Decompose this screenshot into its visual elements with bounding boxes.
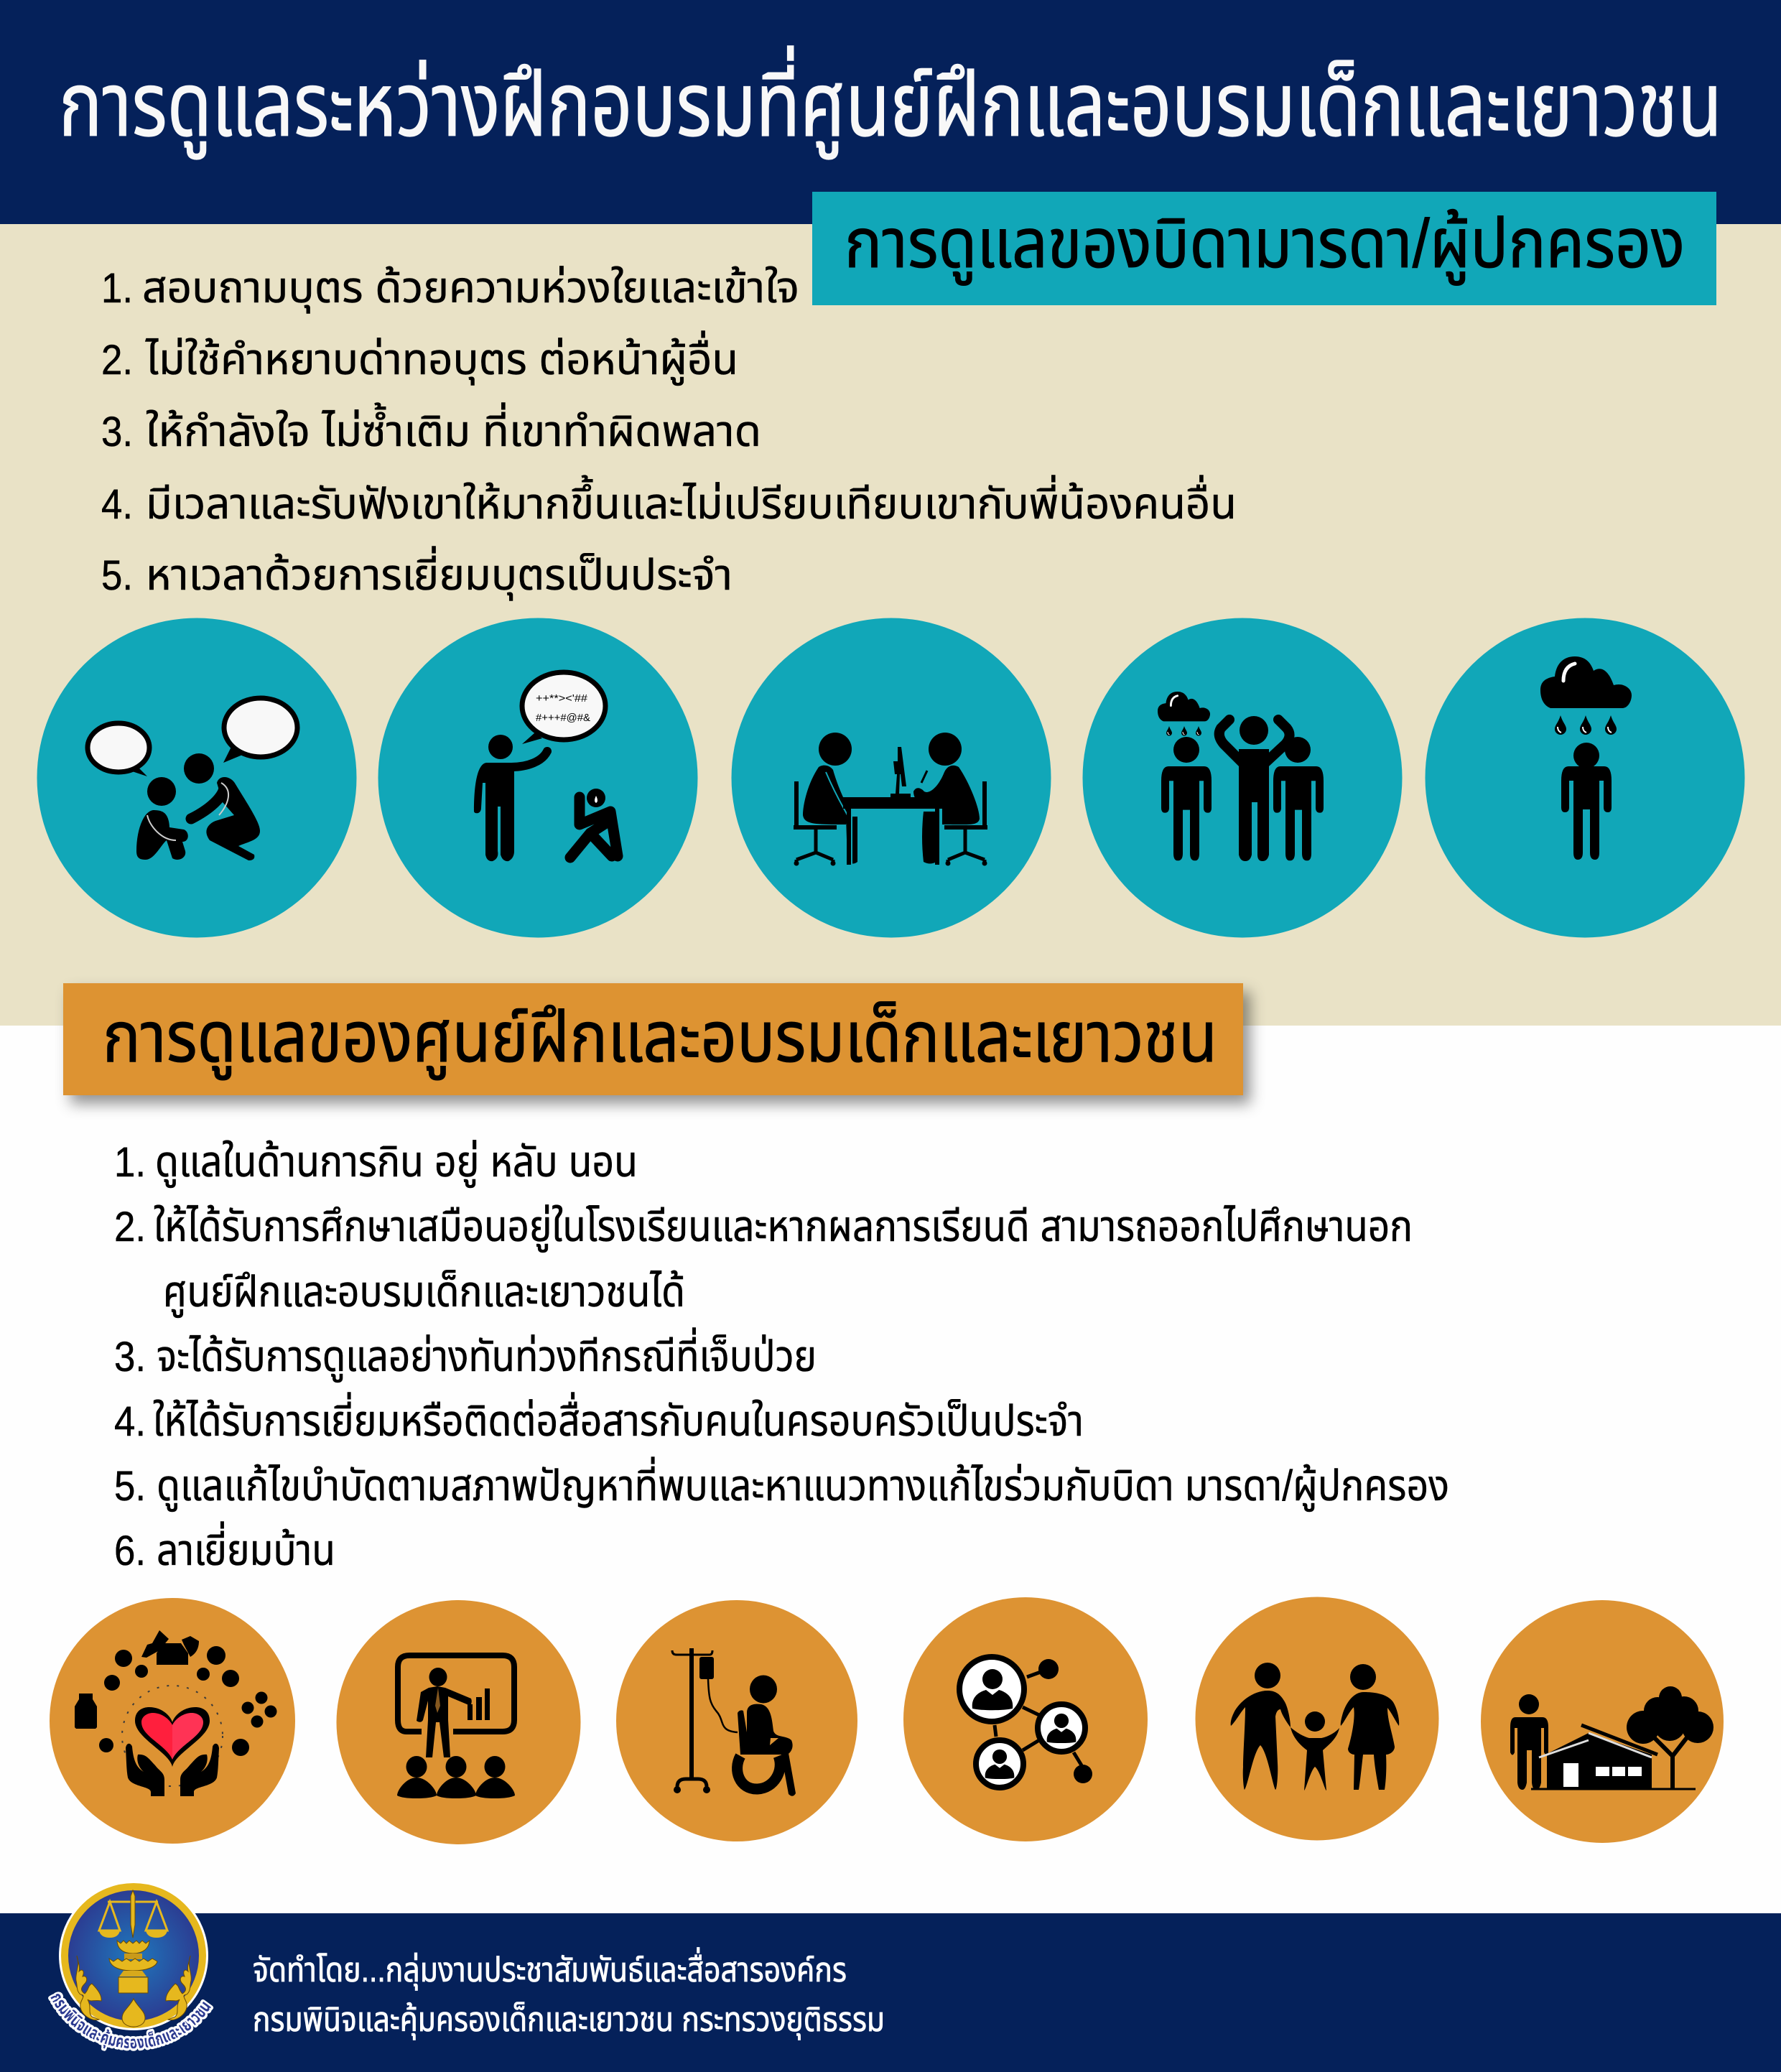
list: parents care items: สอบถามบุตร ด้วยความห่วงใยและเข้าใจ xyxy=(142,264,799,314)
header band xyxy=(0,0,1781,224)
icon: teacher with class xyxy=(336,1600,580,1844)
list: parents care items: ไม่ใช้คำหยาบด่าทอบุตร ต่อหน้าผู้อื่น xyxy=(145,330,738,386)
list: centre care items: 4. xyxy=(114,1398,146,1445)
heading: centre care xyxy=(63,983,1243,1095)
footer credit text xyxy=(253,1947,885,2040)
list: centre care items: ดูแลในด้านการกิน อยู่ หลับ นอน xyxy=(155,1138,638,1188)
list: parents care items: 3. xyxy=(101,409,133,455)
list: centre care items: ให้ได้รับการเยี่ยมหรือติดต่อสื่อสารกับคนในครอบครัวเป็นประจำ xyxy=(153,1392,1084,1445)
list: centre care items: ลาเยี่ยมบ้าน xyxy=(157,1521,335,1574)
list: centre care items xyxy=(114,1138,1449,1574)
list: centre care items: 2. xyxy=(114,1204,146,1250)
icon: caring hands with heart xyxy=(50,1598,295,1844)
icon: scolding a child: ++**><'## xyxy=(536,692,588,705)
list: centre care items: ดูแลแก้ไขบำบัดตามสภาพปัญหาที่พบและหาแนวทางแก้ไขร่วมกับบิดา มารดา/ผู้ปกครอง xyxy=(157,1457,1449,1512)
list: parents care items: 4. xyxy=(101,481,133,528)
icon: person under rain cloud xyxy=(1425,618,1745,938)
list: parents care items: มีเวลาและรับฟังเขาให้มากขึ้นและไม่เปรียบเทียบเขากับพี่น้องคนอื่น xyxy=(146,475,1237,528)
list: parents care items: 5. xyxy=(101,552,133,599)
icon: comforting conversation xyxy=(37,618,356,938)
list: centre care items: 5. xyxy=(114,1463,146,1510)
logo: department emblem xyxy=(48,1883,214,2051)
icon: person, home and tree xyxy=(1481,1600,1724,1843)
icon: patient with drip in wheelchair xyxy=(616,1600,857,1841)
panel: parents care background xyxy=(0,224,1781,1026)
list: centre care items: ให้ได้รับการศึกษาเสมือนอยู่ในโรงเรียนและหากผลการเรียนดี สามารถออกไปศึกษานอก xyxy=(154,1202,1413,1253)
icon: scolding a child: #+++#@#& xyxy=(536,712,590,724)
footer credit text: จัดทำโดย...กลุ่มงานประชาสัมพันธ์และสื่อสารองค์กร xyxy=(253,1947,847,1990)
footer credit text: กรมพินิจและคุ้มครองเด็กและเยาวชน กระทรวงยุติธรรม xyxy=(253,2000,885,2040)
heading: parents care xyxy=(812,192,1716,305)
list: centre care items: จะได้รับการดูแลอย่างทันท่วงทีกรณีที่เจ็บป่วย xyxy=(157,1327,817,1383)
list: parents care items: 1. xyxy=(101,265,133,312)
icon: connected people network xyxy=(903,1597,1148,1841)
list: centre care items: 3. xyxy=(114,1334,146,1380)
list: centre care items: 6. xyxy=(114,1528,146,1574)
list: centre care items: ศูนย์ฝึกและอบรมเด็กและเยาวชนได้ xyxy=(163,1268,685,1318)
icon: scolding a child xyxy=(378,618,698,938)
list: centre care items: 1. xyxy=(114,1139,146,1186)
list: parents care items: 2. xyxy=(101,337,133,384)
list: parents care items: หาเวลาด้วยการเยี่ยมบุตรเป็นประจำ xyxy=(146,546,733,601)
heading: parents care: การดูแลของบิดามารดา/ผู้ปกครอง xyxy=(845,205,1685,286)
list: parents care items xyxy=(101,264,1237,601)
icon: two people talking at a desk xyxy=(731,618,1051,938)
icon: family holding hands xyxy=(1195,1597,1439,1840)
list: parents care items: ให้กำลังใจ ไม่ซ้ำเติม ที่เขาทำผิดพลาด xyxy=(146,402,761,455)
logo ribbon text: กรมพินิจและคุ้มครองเด็กและเยาวชน xyxy=(48,1992,214,2051)
icon: group with rain cloud xyxy=(1083,618,1402,938)
heading: centre care: การดูแลของศูนย์ฝึกและอบรมเด็กและเยาวชน xyxy=(103,998,1217,1080)
footer band xyxy=(0,1913,1781,2072)
